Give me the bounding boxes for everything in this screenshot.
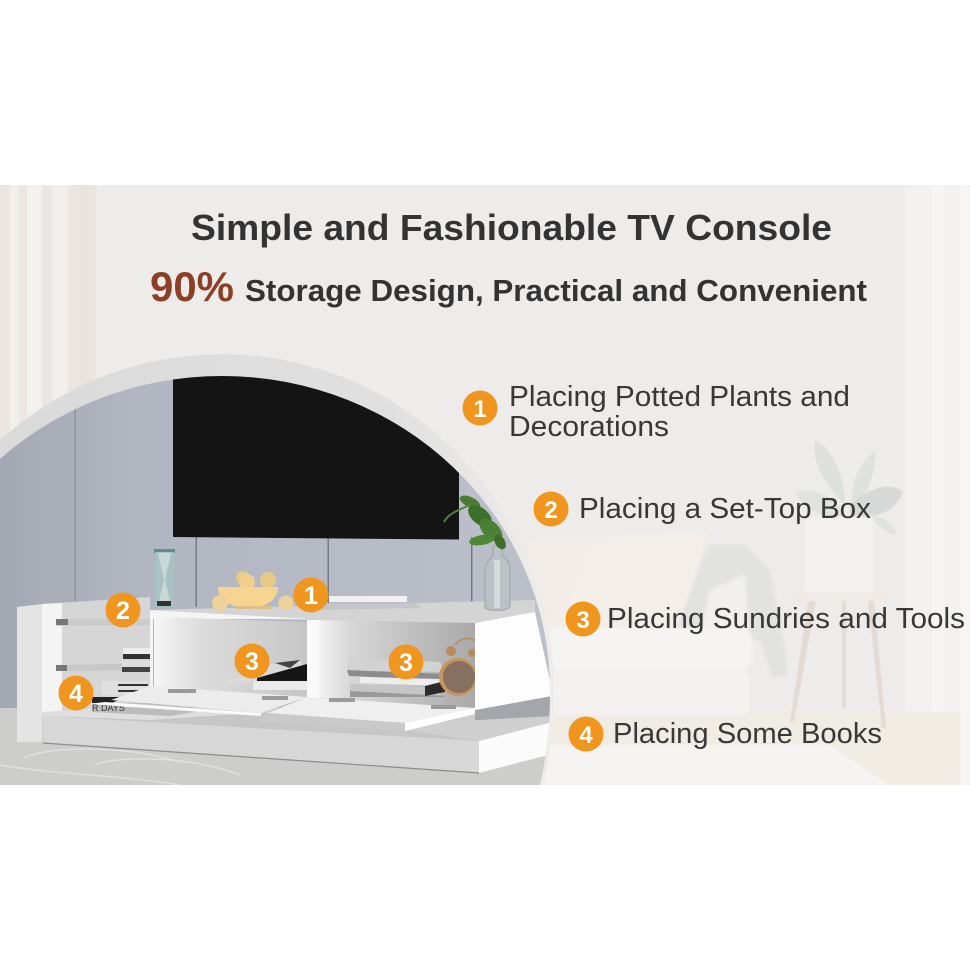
subtitle: Storage Design, Practical and Convenient (245, 273, 867, 308)
photo marker 3 left (234, 644, 270, 678)
left cavity (154, 617, 307, 697)
photo marker 4: 4 (69, 680, 83, 708)
photo marker 1: 1 (304, 582, 318, 610)
arc band behind scene (0, 354, 554, 785)
green plant (444, 493, 508, 551)
main cabinet (88, 600, 552, 731)
floor and rug (545, 712, 960, 785)
photo marker 3 right (388, 644, 424, 680)
scene: TV console photo in arch (0, 360, 560, 788)
alarm clock (439, 638, 475, 696)
right curtain (932, 186, 970, 784)
hinges (168, 689, 456, 709)
title: Simple and Fashionable TV Console (191, 207, 832, 248)
photo marker 3 left: 3 (245, 648, 259, 676)
background room photo (0, 185, 970, 785)
right cavity (311, 620, 475, 708)
list item 3: 3 (576, 607, 590, 634)
hourglass (154, 549, 175, 607)
television (173, 370, 459, 540)
left drop door (111, 686, 307, 713)
magazine on top (322, 596, 421, 610)
black box and tilted items (254, 660, 303, 681)
photo marker 3 right: 3 (399, 649, 413, 677)
console base (43, 696, 552, 773)
glass vase (485, 546, 510, 610)
list item 3: Placing Sundries and Tools (607, 603, 965, 635)
photo marker 2: 2 (116, 597, 130, 625)
list item 1: Placing Potted Plants and (509, 381, 850, 413)
faded potted plant on side table (790, 440, 903, 728)
list item 4: 4 (579, 722, 593, 749)
list item 2: 2 (544, 497, 558, 524)
list item 4: Placing Some Books (613, 718, 882, 750)
list item 1: 1 (473, 396, 487, 423)
right drop door (268, 697, 475, 723)
photo marker 1 (294, 578, 328, 612)
carpet (0, 708, 560, 788)
glass shelves (56, 619, 150, 626)
list item 1 (462, 381, 850, 443)
photo marker 2 (106, 592, 140, 628)
bowl of fruit (212, 571, 294, 611)
subtitle (150, 263, 867, 310)
stacked books (123, 648, 151, 654)
subtitle: 90% (150, 263, 234, 310)
left open compartment (17, 597, 240, 742)
list item 1: Decorations (509, 411, 669, 443)
list item 2: Placing a Set-Top Box (579, 493, 872, 525)
faded sofa (550, 546, 786, 714)
left open compartment: R DAYS (92, 703, 125, 713)
wall (0, 360, 560, 720)
right end panel (475, 612, 552, 710)
magazines (347, 658, 445, 697)
left curtain (80, 186, 96, 386)
photo marker 4 (58, 676, 94, 710)
